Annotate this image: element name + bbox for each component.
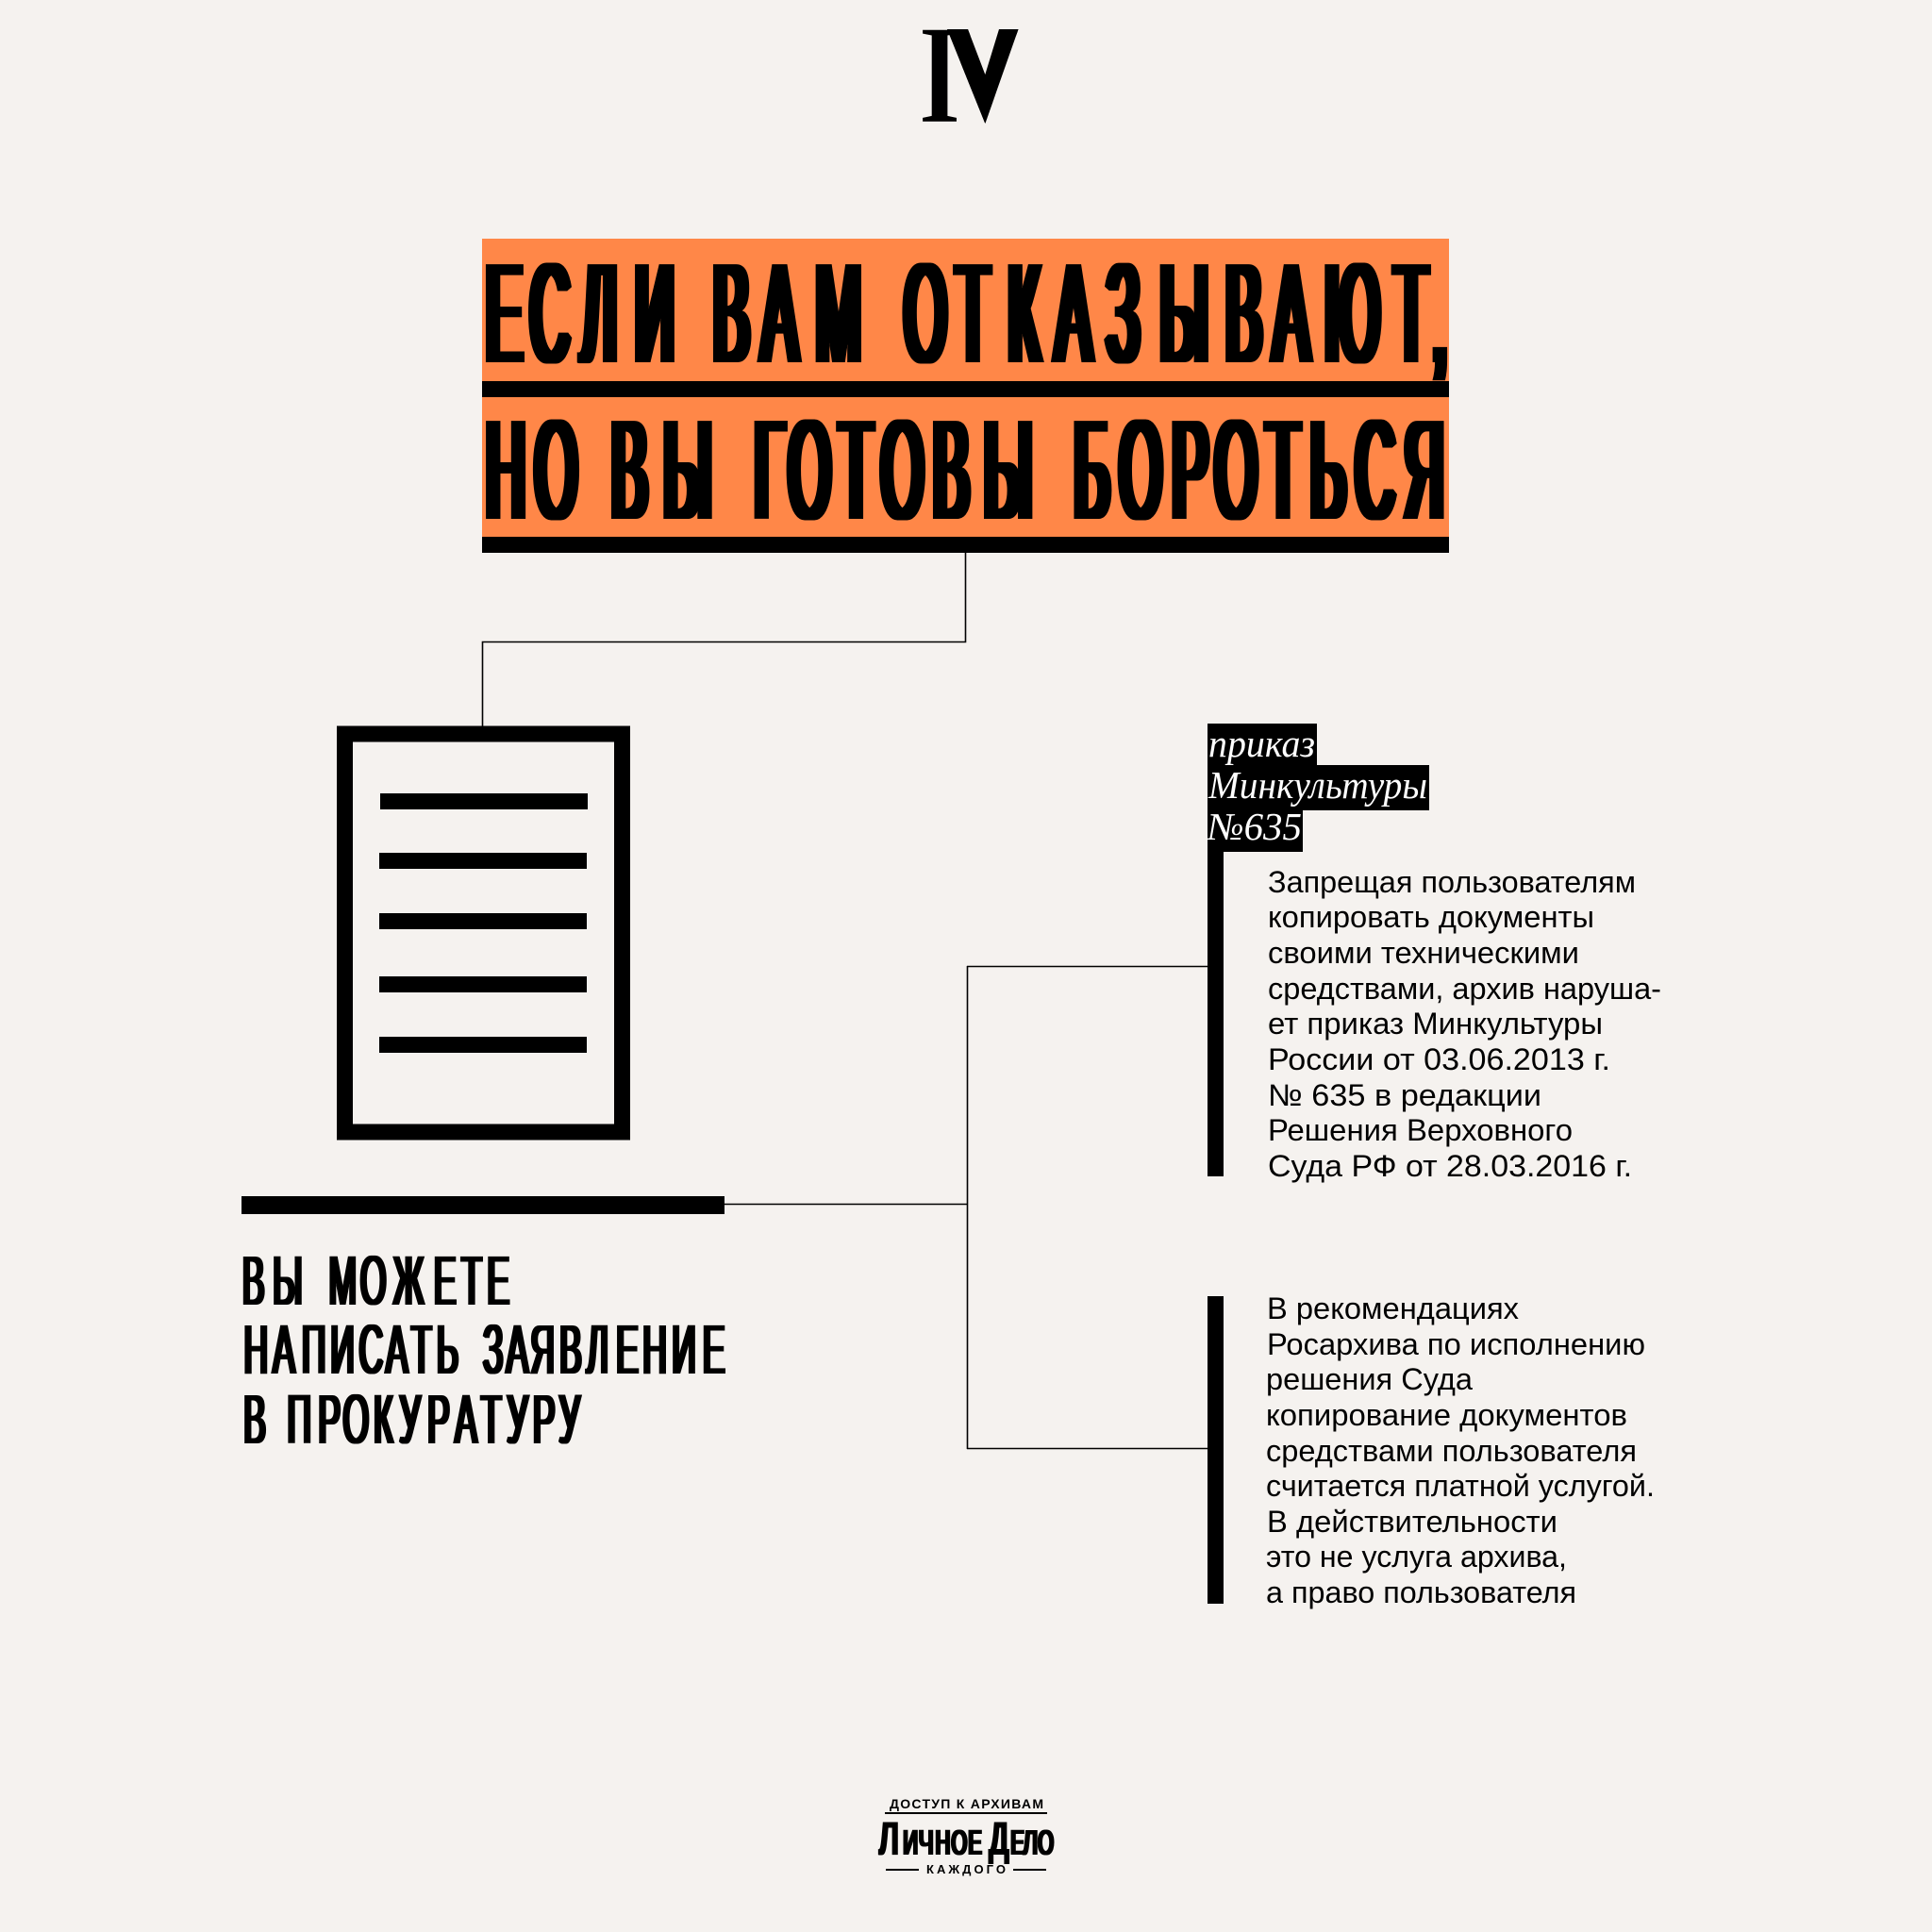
- subheading rule: [242, 1196, 724, 1214]
- title rule 1: [482, 381, 1449, 397]
- subheading text: ВЫ МОЖЕТЕ: [242, 1242, 509, 1321]
- label: приказ Минкультуры №635: Минкультуры: [1208, 763, 1427, 807]
- subheading text: В ПРОКУРАТУРУ: [243, 1381, 581, 1459]
- section numeral IV: V: [945, 0, 1021, 152]
- note 2 bar: [1208, 1296, 1224, 1604]
- title orange background: [482, 239, 1449, 553]
- note 2 text: средствами пользователя: [1266, 1434, 1637, 1468]
- note 1 text: России от 03.06.2013 г.: [1268, 1042, 1610, 1076]
- note 2 text: это не услуга архива,: [1266, 1540, 1567, 1574]
- note 1 text: копировать документы: [1268, 900, 1594, 934]
- note 1 text: № 635 в редакции: [1268, 1078, 1541, 1112]
- title rule 2: [482, 537, 1449, 553]
- label: приказ Минкультуры №635: [1206, 722, 1429, 852]
- note 1 text: средствами, архив наруша-: [1268, 972, 1661, 1006]
- note 2 text: В действительности: [1267, 1505, 1557, 1539]
- bracket connector to right-hand notes: [724, 966, 1208, 1449]
- title line 1: ЕСЛИ ВАМ ОТКАЗЫВАЮТ,: [486, 235, 1447, 393]
- icon: document: [345, 734, 623, 1132]
- note 2 text: В рекомендациях: [1267, 1291, 1519, 1325]
- note 2 text: решения Суда: [1266, 1362, 1474, 1396]
- connector from title to document icon: [483, 553, 966, 726]
- note 1 text: ет приказ Минкультуры: [1268, 1007, 1603, 1041]
- logo: Личное Дело каждого: ЛИЧНОЕ ДЕЛО: [879, 1812, 1055, 1865]
- label: приказ Минкультуры №635: №635: [1206, 805, 1302, 848]
- note 1 text: своими техническими: [1268, 936, 1579, 970]
- note 1 bar: [1208, 852, 1224, 1176]
- note 1 text: Запрещая пользователям: [1268, 865, 1636, 899]
- note 1 text: [1268, 865, 1661, 1183]
- note 2 text: Росархива по исполнению: [1267, 1327, 1645, 1361]
- section numeral IV: I: [922, 0, 958, 153]
- note 1 text: Решения Верховного: [1268, 1113, 1573, 1147]
- logo: Личное Дело каждого: КАЖДОГО: [926, 1862, 1006, 1876]
- subheading text: [242, 1242, 725, 1459]
- note 1 text: Суда РФ от 28.03.2016 г.: [1268, 1149, 1632, 1183]
- note 2 text: копирование документов: [1266, 1398, 1627, 1432]
- note 2 text: [1266, 1291, 1655, 1609]
- subheading text: НАПИСАТЬ ЗАЯВЛЕНИЕ: [243, 1311, 725, 1390]
- title line 2: НО ВЫ ГОТОВЫ БОРОТЬСЯ: [486, 391, 1443, 550]
- note 2 text: а право пользователя: [1266, 1575, 1576, 1609]
- logo: Личное Дело каждого: [879, 1796, 1055, 1876]
- note 2 text: считается платной услугой.: [1266, 1469, 1655, 1503]
- title block: [482, 235, 1449, 553]
- logo: Личное Дело каждого: ДОСТУП К АРХИВАМ: [890, 1796, 1043, 1811]
- section numeral IV: [923, 29, 1019, 124]
- label: приказ Минкультуры №635: приказ: [1208, 722, 1315, 765]
